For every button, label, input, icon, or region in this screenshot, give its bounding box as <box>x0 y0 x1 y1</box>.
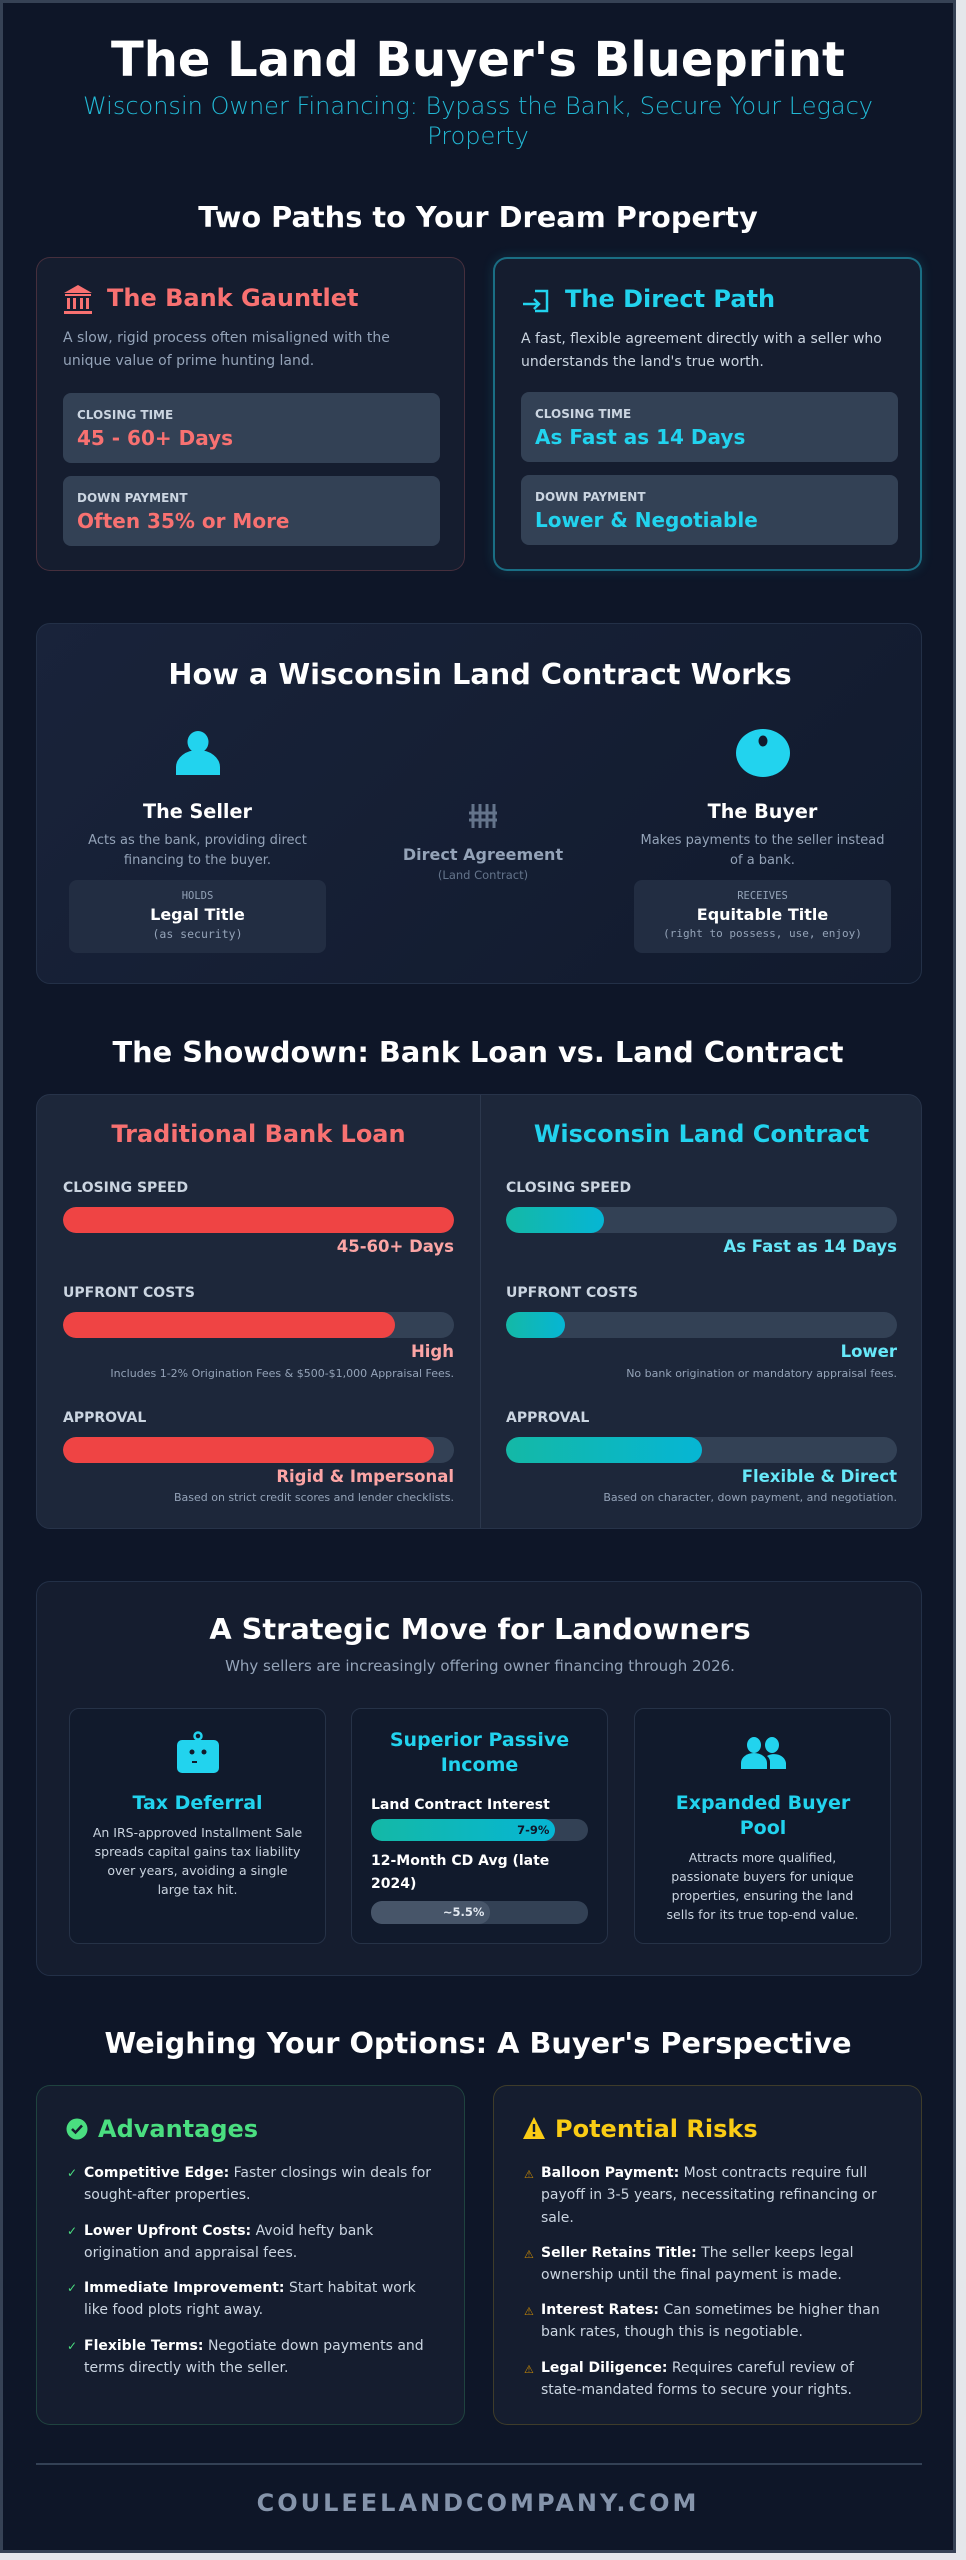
stat: closing time: As Fast as 14 Days <box>535 425 745 449</box>
list: advantages: ✓ <box>67 2166 77 2180</box>
title: Superior Passive Income <box>390 1729 569 1776</box>
buyer description: Makes payments to the seller instead of a bank. <box>640 833 885 868</box>
icon: check circle <box>66 2118 88 2140</box>
description: A fast, flexible agreement directly with a seller who understands the land's true worth. <box>521 331 882 370</box>
equitable title box <box>634 880 891 953</box>
list: advantages: Lower Upfront Costs: Avoid hefty bank origination and appraisal fees. <box>84 2222 373 2261</box>
bar: upfront costs: Includes 1-2% Origination Fees & $500-$1,000 Appraisal Fees. <box>110 1367 454 1380</box>
list: advantages: Immediate Improvement: Start habitat work like food plots right away. <box>84 2280 416 2318</box>
description: A slow, rigid process often misaligned with the unique value of prime hunting land. <box>63 330 390 369</box>
heading: Advantages <box>98 2115 258 2143</box>
card: passive income <box>351 1708 608 1944</box>
bar: approval: APPROVAL <box>63 1410 146 1426</box>
column: land contract <box>506 1120 897 1504</box>
list: risks: Balloon Payment: Most contracts require full payoff in 3-5 years, necessitating refinancing or sale. <box>541 2165 877 2226</box>
panel: comparison chart <box>36 1094 922 1529</box>
heading: A Strategic Move for Landowners <box>209 1612 751 1646</box>
bar: closing speed: CLOSING SPEED <box>63 1180 188 1196</box>
legal title box: (as security) <box>152 927 242 941</box>
list: risks: ⚠ <box>524 2168 534 2181</box>
list: advantages: ✓ <box>67 2224 77 2238</box>
bar: upfront costs <box>506 1285 897 1380</box>
stat: closing time <box>521 392 898 462</box>
list: advantages: Flexible Terms: Negotiate down payments and terms directly with the seller. <box>84 2338 424 2376</box>
bar: land contract interest: Land Contract Interest <box>371 1797 550 1813</box>
icon: agreement <box>469 804 497 828</box>
icon: direct path <box>523 290 548 312</box>
stat: down payment: Often 35% or More <box>77 509 290 533</box>
subtitle: Property <box>427 122 529 150</box>
icon: users <box>741 1737 786 1769</box>
legal title box <box>69 880 326 953</box>
title: Expanded Buyer Pool <box>676 1792 850 1839</box>
title: The Land Buyer's Blueprint <box>111 32 845 88</box>
bar: closing speed <box>63 1180 454 1256</box>
equitable title box: Equitable Title <box>697 905 828 924</box>
bar: upfront costs: UPFRONT COSTS <box>63 1285 195 1301</box>
list: risks: Legal Diligence: Requires careful review of state-mandated forms to secure your rights. <box>541 2360 854 2398</box>
bar: cd average: 12-Month CD Avg (late 2024) <box>371 1853 549 1892</box>
list: advantages: Competitive Edge: Faster closings win deals for sought-after properties. <box>84 2165 431 2203</box>
column heading: Wisconsin Land Contract <box>534 1120 869 1148</box>
buyer column <box>634 729 891 953</box>
stat: closing time: CLOSING TIME <box>535 407 631 421</box>
bar: approval: Based on strict credit scores and lender checklists. <box>174 1491 454 1504</box>
list: advantages <box>67 2165 431 2376</box>
footer: COULEELANDCOMPANY.COM <box>257 2489 699 2517</box>
seller column <box>69 731 326 953</box>
text: Attracts more qualified, passionate buyers for unique properties, ensuring the land sells for its true top-end value. <box>667 1850 858 1922</box>
bar: upfront costs: High <box>411 1342 454 1361</box>
panel: direct path <box>493 257 922 571</box>
heading: two paths: Two Paths to Your Dream Property <box>198 200 758 234</box>
list: risks: ⚠ <box>524 2362 534 2376</box>
buyer name: The Buyer <box>708 800 817 823</box>
bar: closing speed: As Fast as 14 Days <box>723 1237 897 1256</box>
icon: buyer <box>736 729 790 777</box>
bar: upfront costs <box>63 1285 454 1380</box>
heading: weighing options: Weighing Your Options: A Buyer's Perspective <box>104 2026 852 2060</box>
bar: closing speed <box>506 1180 897 1256</box>
stat: down payment: Lower & Negotiable <box>535 508 758 532</box>
label: Direct Agreement <box>403 845 563 864</box>
list: risks: Interest Rates: Can sometimes be higher than bank rates, though this is negotiable. <box>541 2302 880 2340</box>
list: risks: ⚠ <box>524 2248 534 2260</box>
text: An IRS-approved Installment Sale spreads capital gains tax liability over years, avoiding a single large tax hit. <box>93 1825 302 1897</box>
stat: down payment: DOWN PAYMENT <box>77 491 188 505</box>
subheading: Why sellers are increasingly offering owner financing through 2026. <box>225 1657 735 1675</box>
bar: upfront costs: No bank origination or mandatory appraisal fees. <box>626 1367 897 1380</box>
heading: showdown: The Showdown: Bank Loan vs. Land Contract <box>112 1035 843 1069</box>
bar: approval: Based on character, down payment, and negotiation. <box>603 1491 897 1504</box>
bar: closing speed: CLOSING SPEED <box>506 1180 631 1196</box>
card heading: The Direct Path <box>565 285 775 313</box>
panel: advantages <box>36 2085 465 2425</box>
column heading: Traditional Bank Loan <box>111 1120 406 1148</box>
icon: bank <box>64 285 92 314</box>
list: risks: Seller Retains Title: The seller keeps legal ownership until the final payment is made. <box>541 2244 854 2283</box>
panel: strategic move <box>36 1581 922 1976</box>
stat: closing time <box>63 393 440 463</box>
icon: seller <box>176 731 220 775</box>
panel: potential risks <box>493 2085 922 2425</box>
heading: How a Wisconsin Land Contract Works <box>168 657 792 691</box>
list: advantages: ✓ <box>67 2338 77 2352</box>
card: tax deferral <box>69 1708 326 1944</box>
bar: approval <box>63 1410 454 1504</box>
equitable title box: RECEIVES <box>737 890 788 902</box>
icon: tax <box>177 1731 219 1773</box>
seller description: Acts as the bank, providing direct financing to the buyer. <box>88 833 307 868</box>
subtitle: Wisconsin Owner Financing: Bypass the Bank, Secure Your Legacy <box>83 92 873 120</box>
panel: bank gauntlet <box>36 257 465 571</box>
bar: cd average <box>371 1853 588 1924</box>
bar: approval <box>506 1410 897 1504</box>
equitable title box: (right to possess, use, enjoy) <box>663 927 862 940</box>
icon: warning <box>523 2117 545 2139</box>
card heading: The Bank Gauntlet <box>107 284 358 312</box>
bar: land contract interest <box>371 1797 588 1841</box>
stat: down payment: DOWN PAYMENT <box>535 490 646 504</box>
legal title box: Legal Title <box>150 905 245 924</box>
seller name: The Seller <box>143 800 252 823</box>
sublabel: (Land Contract) <box>438 868 528 882</box>
stat: down payment <box>63 476 440 546</box>
bar: cd average: ~5.5% <box>443 1905 484 1919</box>
stat: closing time: 45 - 60+ Days <box>77 426 233 450</box>
card: buyer pool <box>634 1708 891 1944</box>
legal title box: HOLDS <box>182 890 213 902</box>
title: Tax Deferral <box>132 1792 263 1814</box>
bar: approval: Flexible & Direct <box>742 1467 897 1486</box>
bar: land contract interest: 7-9% <box>517 1823 549 1837</box>
list: advantages: ✓ <box>67 2281 77 2295</box>
column: bank loan <box>63 1120 454 1504</box>
bar: upfront costs: Lower <box>841 1342 897 1361</box>
stat: down payment <box>521 475 898 545</box>
subtitle <box>83 92 873 150</box>
bar: approval: APPROVAL <box>506 1410 589 1426</box>
list: risks <box>524 2165 880 2398</box>
heading: Potential Risks <box>555 2115 758 2143</box>
panel: how land contract works <box>36 623 922 984</box>
bar: approval: Rigid & Impersonal <box>276 1467 454 1486</box>
bar: closing speed: 45-60+ Days <box>337 1237 454 1256</box>
stat: closing time: CLOSING TIME <box>77 408 173 422</box>
list: risks: ⚠ <box>524 2305 534 2318</box>
bar: upfront costs: UPFRONT COSTS <box>506 1285 638 1301</box>
center: direct agreement <box>403 804 563 882</box>
